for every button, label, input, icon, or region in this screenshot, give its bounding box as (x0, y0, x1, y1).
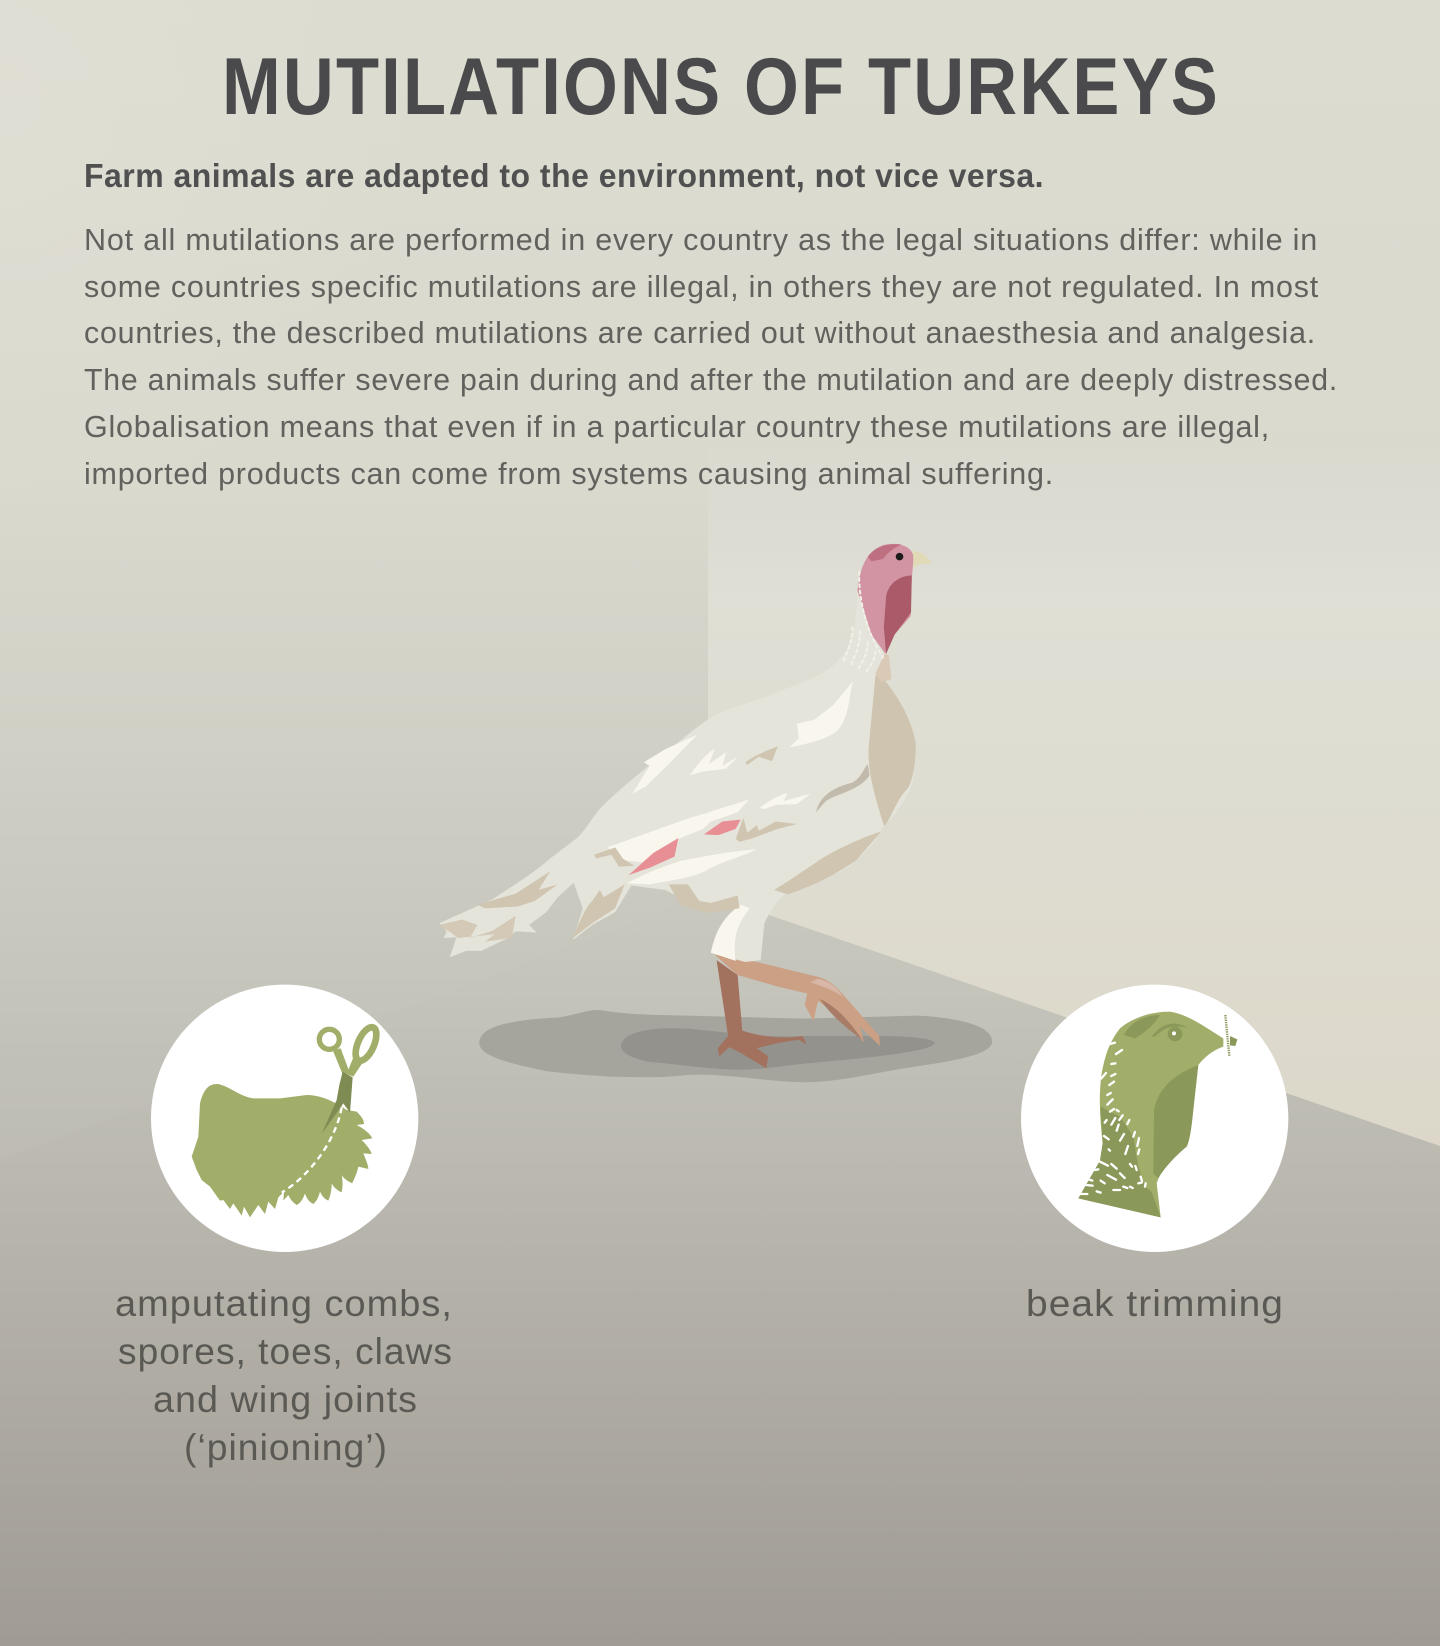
caption: amputating: amputating combs, (115, 1283, 453, 1324)
pink skin patches (629, 820, 741, 875)
caption: amputating: and wing joints (153, 1379, 418, 1420)
tan feather marks (439, 746, 881, 942)
cut line at beak (1225, 1015, 1229, 1056)
standing leg (717, 960, 807, 1068)
icon: scissors (319, 1024, 381, 1134)
neck feathers (843, 572, 883, 672)
caption: amputating: (‘pinioning’) (184, 1427, 388, 1468)
neck feather ticks (1081, 1043, 1146, 1194)
title: MUTILATIONS OF TURKEYS (222, 42, 1220, 132)
raised leg (715, 955, 880, 1046)
circle icon: comb and scissors (151, 985, 418, 1252)
icon: comb (192, 1084, 372, 1217)
icon: turkey head (1078, 1012, 1237, 1217)
body (439, 594, 916, 962)
body text: Not all mutilations are performed in every country as the legal situations differ: while in (84, 222, 1318, 257)
body text: some countries specific mutilations are illegal, in others they are not regulated. In most (84, 269, 1319, 304)
subheading: Farm animals are adapted to the environment, not vice versa. (84, 157, 1044, 194)
caption: amputating: spores, toes, claws (118, 1331, 453, 1372)
tail feathers behind (573, 881, 634, 940)
circle icon: beak trimming (1021, 985, 1288, 1252)
breast patch (868, 675, 916, 826)
body text: imported products can come from systems causing animal suffering. (84, 456, 1054, 491)
ground shadow (479, 1010, 992, 1082)
body text: Globalisation means that even if in a particular country these mutilations are illegal, (84, 409, 1270, 444)
head (857, 544, 932, 683)
caption: amputating (115, 1283, 453, 1468)
body text (84, 222, 1338, 491)
body text: countries, the described mutilations are carried out without anaesthesia and analgesia. (84, 315, 1316, 350)
body text: The animals suffer severe pain during and after the mutilation and are deeply distressed. (84, 362, 1338, 397)
turkey illustration (439, 544, 992, 1082)
cut line (282, 1107, 342, 1193)
caption: beak trimming: beak trimming (1026, 1283, 1284, 1324)
grey wing line (816, 764, 870, 812)
white feather highlights (608, 681, 853, 961)
